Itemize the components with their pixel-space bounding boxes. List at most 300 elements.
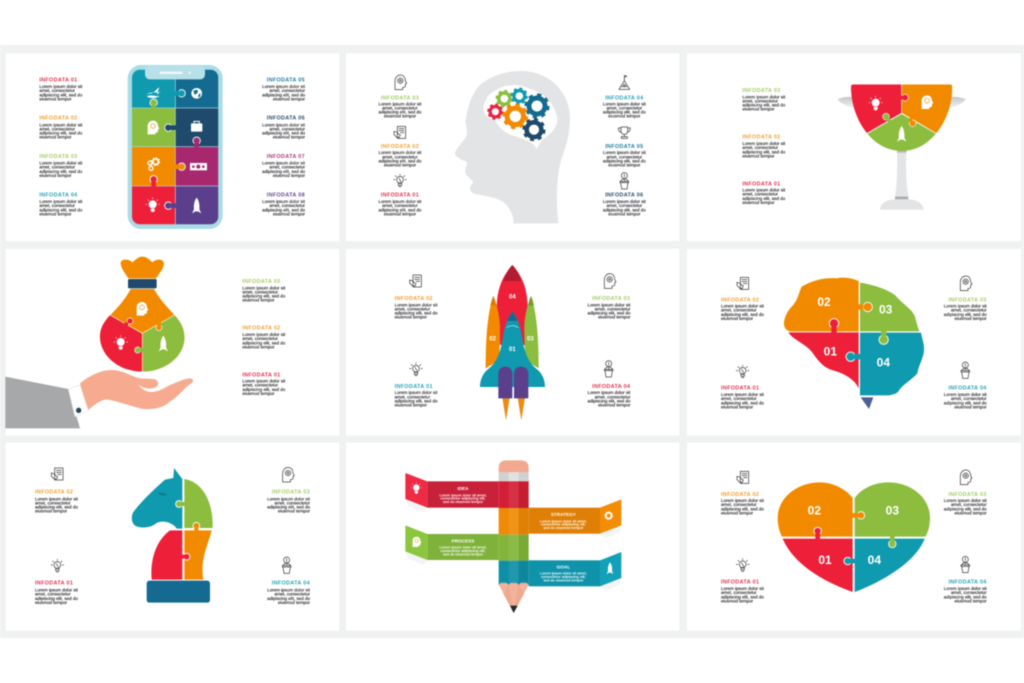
text: infodata 02: amet, consectetur [742, 145, 778, 150]
text: infodata 02: adipiscing elit, sed do [35, 505, 78, 510]
text: infodata 03 [944, 492, 987, 515]
text: infodata 03: INFODATA 03 [592, 296, 630, 302]
text: infodata 02: amet, consectetur [721, 502, 757, 507]
text: infodata 03: Lorem ipsum dolor sit [242, 285, 286, 290]
text: infodata 05: Lorem ipsum dolor sit [262, 84, 306, 89]
text: infodata 06: adipiscing elit, sed do [603, 207, 646, 212]
text: infodata 01: Lorem ipsum dolor sit [721, 392, 765, 397]
icon: bulb [410, 363, 422, 376]
text: infodata 07: Lorem ipsum dolor sit [262, 161, 306, 166]
text: infodata 02: adipiscing elit, sed do [742, 149, 786, 154]
panel: pencil ribbons [346, 443, 679, 631]
piece 01 [783, 539, 853, 592]
piece 02 [184, 530, 212, 580]
sleeve [5, 377, 80, 428]
text: infodata 03: eiusmod tempor [384, 114, 417, 119]
text: infodata 01: eiusmod tempor [395, 402, 427, 407]
puzzle tabs [829, 302, 888, 361]
text: infodata 04: INFODATA 04 [272, 581, 310, 587]
text: infodata 02: adipiscing elit, sed do [721, 506, 764, 511]
icon: plant [604, 361, 613, 377]
numbers: 01 [509, 347, 516, 353]
ribbon: strategy: consectetur adipiscing elit, [541, 523, 586, 527]
text: infodata 03: adipiscing elit, sed do [742, 103, 786, 108]
text: infodata 01: adipiscing elit, sed do [721, 594, 764, 599]
text: infodata 02: INFODATA 02 [742, 135, 781, 141]
piece 02 [778, 482, 853, 537]
text: infodata 04: eiusmod tempor [278, 600, 311, 605]
text: infodata 01: eiusmod tempor [721, 404, 754, 409]
text: infodata 06 [603, 193, 647, 216]
text: infodata 06 [262, 116, 306, 140]
text: infodata 02: Lorem ipsum dolor sit [39, 122, 83, 127]
ribbon: idea: Lorem ipsum dolor sit amet, [439, 493, 487, 497]
text: infodata 02: eiusmod tempor [242, 344, 275, 349]
text: infodata 02 [395, 296, 438, 320]
text: infodata 01: eiusmod tempor [35, 600, 68, 605]
text: infodata 01: amet, consectetur [742, 192, 778, 197]
numbers: 01 [818, 553, 832, 567]
smartphone body [128, 65, 223, 229]
text: infodata 03: INFODATA 03 [742, 88, 781, 94]
text: infodata 02 [379, 144, 422, 167]
text: infodata 01 [742, 181, 786, 205]
text: infodata 02: INFODATA 02 [39, 116, 78, 122]
ribbon: goal: sed do eiusmod tempor [543, 578, 584, 582]
text: infodata 04: adipiscing elit, sed do [944, 594, 987, 599]
text: infodata 05: adipiscing elit, sed do [262, 92, 305, 97]
text: infodata 03: adipiscing elit, sed do [944, 312, 987, 317]
numbers: 03 [527, 336, 534, 342]
text: infodata 03 [587, 296, 631, 320]
ribbon: goal [529, 552, 621, 586]
brain outline [483, 85, 557, 149]
gears [488, 88, 548, 140]
text: infodata 02: Lorem ipsum dolor sit [742, 141, 786, 146]
text: infodata 01: INFODATA 01 [742, 181, 781, 187]
icon: bulb [146, 198, 160, 212]
text: infodata 08: eiusmod tempor [273, 211, 306, 216]
numbers: 04 [877, 356, 890, 370]
icon: banknote [190, 163, 207, 170]
text: infodata 04: Lorem ipsum dolor sit [944, 392, 987, 397]
text: infodata 03: INFODATA 03 [381, 95, 419, 101]
orbiter [480, 312, 545, 387]
icon: trophy [618, 127, 630, 138]
piece 04 [860, 333, 924, 395]
text: infodata 03: Lorem ipsum dolor sit [39, 161, 83, 166]
text: infodata 03: amet, consectetur [951, 308, 987, 313]
text: infodata 03: INFODATA 03 [948, 492, 987, 498]
ribbon: strategy: STRATEGY [551, 512, 577, 517]
text: infodata 03: INFODATA 03 [39, 154, 78, 160]
text: infodata 04: INFODATA 04 [605, 95, 643, 101]
icon: document [51, 468, 63, 480]
text: infodata 03: INFODATA 03 [272, 490, 310, 496]
text: infodata 04: INFODATA 04 [948, 386, 987, 392]
ribbon: process: PROCESS [452, 538, 474, 543]
piece 03 [860, 283, 919, 331]
shirt cuff [68, 385, 88, 417]
text: infodata 01 [379, 193, 422, 216]
text: infodata 04: INFODATA 04 [39, 192, 78, 198]
icon: mountain flag [619, 75, 630, 89]
text: infodata 02: adipiscing elit, sed do [721, 312, 764, 317]
icon: head [922, 95, 933, 109]
text: infodata 01: Lorem ipsum dolor sit [35, 588, 79, 593]
text: infodata 04: eiusmod tempor [598, 402, 631, 407]
trophy stem and base [880, 150, 923, 210]
icon: gears [147, 158, 160, 171]
panel: trophy [687, 53, 1021, 241]
text: infodata 03 [267, 490, 311, 514]
puzzle tabs [150, 90, 200, 209]
ribbon: process [405, 525, 499, 560]
icon: bulb [114, 335, 128, 350]
puzzle bag [99, 288, 186, 372]
text: infodata 03: amet, consectetur [242, 289, 278, 294]
text: infodata 02: eiusmod tempor [35, 509, 68, 514]
text: infodata 01: adipiscing elit, sed do [35, 596, 78, 601]
numbers: 02 [817, 295, 831, 309]
icon: rocket [192, 198, 201, 213]
text: infodata 04: Lorem ipsum dolor sit [944, 586, 987, 591]
ribbon shadows [405, 499, 621, 591]
text: infodata 03: adipiscing elit, sed do [242, 294, 286, 299]
icon: head [395, 75, 407, 90]
text: infodata 03: amet, consectetur [39, 165, 75, 170]
text: infodata 04: adipiscing elit, sed do [267, 596, 310, 601]
text: infodata 08 [262, 192, 306, 216]
icon: bulb [736, 365, 749, 378]
text: infodata 01: Lorem ipsum dolor sit [721, 586, 765, 591]
text: infodata 02: Lorem ipsum dolor sit [35, 496, 79, 501]
text: infodata 03 [39, 154, 83, 178]
text: infodata 01: INFODATA 01 [721, 580, 759, 586]
text: infodata 04 [944, 386, 987, 409]
text: infodata 05: INFODATA 05 [605, 144, 643, 150]
text: infodata 02: amet, consectetur [39, 126, 75, 131]
panel: brain [687, 249, 1021, 436]
text: infodata 02: amet, consectetur [395, 306, 431, 311]
text: infodata 03: amet, consectetur [951, 502, 987, 507]
ribbon: goal: Lorem ipsum dolor sit amet, [540, 572, 587, 576]
icon: bulb [394, 174, 406, 187]
text: infodata 01: Lorem ipsum dolor sit [39, 84, 83, 89]
text: infodata 03: eiusmod tempor [242, 298, 275, 303]
text: infodata 04: adipiscing elit, sed do [603, 110, 646, 115]
text: infodata 04: amet, consectetur [39, 203, 75, 208]
text: infodata 02 [721, 492, 765, 515]
text: infodata 01 [35, 581, 79, 605]
text: infodata 02: Lorem ipsum dolor sit [721, 304, 765, 309]
text: infodata 04: amet, consectetur [951, 396, 987, 401]
text: infodata 02 [721, 298, 765, 321]
text: infodata 02: INFODATA 02 [35, 490, 73, 496]
flames [502, 398, 525, 420]
ribbon: process: Lorem ipsum dolor sit amet, [439, 546, 487, 550]
hand [80, 370, 193, 411]
numbers [808, 504, 899, 567]
text: infodata 01: Lorem ipsum dolor sit [242, 379, 286, 384]
text: infodata 02: adipiscing elit, sed do [39, 131, 83, 136]
text: infodata 02: INFODATA 02 [242, 326, 281, 332]
text: infodata 01: INFODATA 01 [395, 384, 433, 390]
ribbon: strategy [529, 499, 621, 534]
text: infodata 01: amet, consectetur [382, 203, 418, 208]
icon: hand with plane [146, 87, 161, 98]
text: infodata 01: eiusmod tempor [742, 200, 775, 205]
icon: globe [191, 88, 202, 99]
text: infodata 04: adipiscing elit, sed do [944, 400, 987, 405]
text: infodata 01: adipiscing elit, sed do [242, 387, 286, 392]
icon: document [737, 277, 749, 289]
text: infodata 08: Lorem ipsum dolor sit [262, 199, 306, 204]
rocket red body [497, 265, 528, 345]
piece 02 [784, 278, 859, 331]
text: infodata 03: eiusmod tempor [955, 510, 987, 515]
icon: briefcase [191, 121, 202, 132]
text: infodata 02: INFODATA 02 [395, 296, 433, 302]
puzzle screen cells [132, 70, 218, 224]
text: infodata 01: amet, consectetur [721, 590, 757, 595]
text: infodata 04: eiusmod tempor [39, 211, 72, 216]
text: infodata 01: Lorem ipsum dolor sit [395, 390, 438, 395]
text: infodata 01: INFODATA 01 [39, 78, 78, 84]
text: infodata 05 [262, 78, 306, 101]
text: infodata 06: adipiscing elit, sed do [262, 131, 305, 136]
icon: rocket [897, 126, 906, 142]
numbers: 03 [886, 504, 899, 518]
text: infodata 06: eiusmod tempor [608, 211, 641, 216]
phone notch [145, 66, 205, 79]
text: infodata 04: amet, consectetur [595, 394, 631, 399]
text: infodata 03: INFODATA 03 [948, 298, 987, 304]
text: infodata 01: adipiscing elit, sed do [721, 400, 764, 405]
text: infodata 05: amet, consectetur [607, 154, 643, 159]
knight head piece [132, 468, 182, 529]
numbers: 01 [824, 344, 837, 358]
text: infodata 03: adipiscing elit, sed do [39, 169, 83, 174]
panel: rocket [346, 249, 679, 436]
text: infodata 01: Lorem ipsum dolor sit [742, 188, 786, 193]
text: infodata 03 [742, 88, 786, 112]
text: infodata 04 [39, 192, 83, 216]
piece 04 [855, 539, 925, 592]
panel: money bag and hand [5, 249, 339, 436]
text: infodata 03: Lorem ipsum dolor sit [742, 94, 786, 99]
icon: head [283, 467, 294, 482]
piece 01 [151, 530, 182, 580]
bag top [121, 257, 164, 278]
puzzle tabs [176, 501, 200, 560]
ribbon: idea: consectetur adipiscing elit, [441, 497, 485, 501]
text: infodata 03 [379, 95, 422, 119]
ribbon: process: sed do eiusmod tempor [443, 552, 484, 556]
text: infodata 06: amet, consectetur [607, 203, 643, 208]
text: infodata 04: eiusmod tempor [955, 598, 987, 603]
text: infodata 01: INFODATA 01 [242, 372, 281, 378]
text: infodata 05: adipiscing elit, sed do [603, 158, 646, 163]
panel: heart [687, 443, 1021, 631]
ribbon: goal: consectetur adipiscing elit, [541, 575, 586, 579]
piece 03 [184, 479, 213, 528]
text: infodata 04: adipiscing elit, sed do [587, 398, 631, 403]
numbers: 03 [879, 303, 893, 317]
icon: rocket [159, 336, 168, 351]
text: infodata 04: Lorem ipsum dolor sit [267, 588, 311, 593]
text: infodata 05 [603, 144, 647, 167]
icon: document [410, 275, 421, 287]
icon: plant [961, 556, 970, 573]
right booster [524, 296, 539, 368]
text: infodata 01: Lorem ipsum dolor sit [379, 199, 422, 204]
icon: head [960, 470, 972, 485]
text: infodata 01 [242, 372, 286, 396]
text: infodata 03: eiusmod tempor [955, 316, 987, 321]
text: infodata 02: Lorem ipsum dolor sit [395, 302, 438, 307]
text: infodata 03: eiusmod tempor [742, 107, 775, 112]
text: infodata 01: amet, consectetur [35, 592, 71, 597]
text: infodata 03: Lorem ipsum dolor sit [587, 302, 631, 307]
icon: head [604, 274, 616, 288]
engines [498, 367, 528, 398]
text: infodata 03: adipiscing elit, sed do [267, 505, 310, 510]
text: infodata 06: INFODATA 06 [605, 193, 643, 199]
numbers [489, 294, 534, 353]
text: infodata 03: INFODATA 03 [242, 279, 281, 285]
puzzle tabs [814, 512, 896, 565]
text: infodata 04: adipiscing elit, sed do [39, 207, 83, 212]
text: infodata 02: eiusmod tempor [721, 316, 754, 321]
text: infodata 02: Lorem ipsum dolor sit [379, 150, 422, 155]
text: infodata 04: amet, consectetur [951, 590, 987, 595]
text: infodata 02: amet, consectetur [721, 308, 757, 313]
text: infodata 02: eiusmod tempor [384, 162, 417, 167]
panel: smartphone puzzle [6, 53, 339, 241]
text: infodata 08: adipiscing elit, sed do [262, 207, 305, 212]
text: infodata 02: eiusmod tempor [39, 135, 72, 140]
text: infodata 03: eiusmod tempor [278, 509, 311, 514]
text: infodata 02: eiusmod tempor [395, 315, 427, 320]
icon: bulb [736, 559, 749, 571]
text: infodata 03: Lorem ipsum dolor sit [267, 496, 311, 501]
text: infodata 04: amet, consectetur [274, 592, 310, 597]
cuff button [76, 408, 81, 413]
text: infodata 01 [721, 580, 765, 603]
ribbon: process: consectetur adipiscing elit, [441, 549, 485, 553]
text: infodata 03: eiusmod tempor [39, 173, 72, 178]
text: infodata 02: amet, consectetur [35, 500, 71, 505]
text: infodata 04: INFODATA 04 [948, 580, 987, 586]
text: infodata 04: Lorem ipsum dolor sit [603, 101, 647, 106]
icon: bulb [869, 96, 883, 110]
icon: plant [961, 362, 970, 378]
text: infodata 06: INFODATA 06 [267, 116, 305, 122]
text: infodata 02: INFODATA 02 [721, 492, 759, 498]
text: infodata 01: amet, consectetur [39, 88, 75, 93]
text: infodata 08: amet, consectetur [269, 203, 305, 208]
text: infodata 05: INFODATA 05 [267, 78, 305, 84]
piece 03 [855, 482, 930, 537]
text: infodata 01: INFODATA 01 [721, 386, 759, 392]
pencil [499, 460, 529, 613]
text: infodata 07 [262, 154, 306, 178]
text: infodata 07: adipiscing elit, sed do [262, 169, 305, 174]
puzzle cup [848, 82, 955, 155]
text: infodata 03 [944, 298, 987, 321]
icon: plant [620, 173, 629, 189]
text: infodata 04 [267, 581, 311, 605]
text: infodata 07: amet, consectetur [269, 165, 305, 170]
text: infodata 02: eiusmod tempor [721, 510, 754, 515]
text: infodata 02: eiusmod tempor [742, 153, 775, 158]
text: infodata 08: INFODATA 08 [267, 192, 305, 198]
text: infodata 04: eiusmod tempor [955, 404, 987, 409]
text: infodata 03: amet, consectetur [382, 105, 418, 110]
icon: head [148, 121, 159, 134]
text: infodata 01: INFODATA 01 [35, 581, 73, 587]
text: infodata 01: amet, consectetur [242, 383, 278, 388]
text: infodata 05: Lorem ipsum dolor sit [603, 150, 647, 155]
text: infodata 01: adipiscing elit, sed do [39, 92, 83, 97]
text: infodata 03: Lorem ipsum dolor sit [944, 498, 987, 503]
text: infodata 01: adipiscing elit, sed do [395, 398, 438, 403]
text: infodata 01: INFODATA 01 [381, 193, 419, 199]
text: infodata 01: eiusmod tempor [384, 211, 417, 216]
piece 01 [788, 332, 859, 388]
numbers: 04 [868, 553, 881, 567]
icon: head [960, 276, 972, 291]
text: infodata 05: eiusmod tempor [608, 162, 641, 167]
text: infodata 03: Lorem ipsum dolor sit [944, 304, 987, 309]
text: infodata 02: Lorem ipsum dolor sit [242, 332, 286, 337]
text: infodata 03: eiusmod tempor [598, 315, 631, 320]
numbers: 02 [489, 336, 497, 342]
brain stem [861, 397, 873, 409]
text: infodata 02 [39, 116, 83, 140]
icon: document [394, 126, 406, 138]
text: infodata 02 [35, 490, 79, 514]
ribbon: idea: sed do eiusmod tempor [443, 500, 484, 504]
text: infodata 04: INFODATA 04 [592, 384, 630, 390]
panel: chess knight [6, 443, 339, 631]
text: infodata 02: adipiscing elit, sed do [242, 340, 286, 345]
text: infodata 02: amet, consectetur [242, 336, 278, 341]
text: infodata 06: Lorem ipsum dolor sit [603, 199, 647, 204]
knight base [147, 581, 210, 603]
icon: head [137, 302, 148, 316]
text: infodata 02: INFODATA 02 [721, 298, 759, 304]
text: infodata 03: adipiscing elit, sed do [379, 110, 422, 115]
text: infodata 01: eiusmod tempor [242, 391, 275, 396]
text: infodata 01: amet, consectetur [721, 396, 757, 401]
text: infodata 05: eiusmod tempor [273, 96, 306, 101]
text: infodata 02: Lorem ipsum dolor sit [721, 498, 765, 503]
text: infodata 04: eiusmod tempor [608, 114, 641, 119]
text: infodata 04 [603, 95, 647, 119]
numbers [817, 295, 893, 370]
text: infodata 04: Lorem ipsum dolor sit [587, 390, 631, 395]
knight eye [157, 493, 167, 496]
ribbon: strategy: sed do eiusmod tempor [543, 526, 584, 530]
text: infodata 01: eiusmod tempor [721, 598, 754, 603]
text: infodata 03: Lorem ipsum dolor sit [379, 101, 422, 106]
text: infodata 02: adipiscing elit, sed do [379, 158, 422, 163]
trophy handles [838, 97, 966, 108]
text: infodata 02 [242, 326, 286, 349]
icon: bulb [51, 559, 64, 572]
